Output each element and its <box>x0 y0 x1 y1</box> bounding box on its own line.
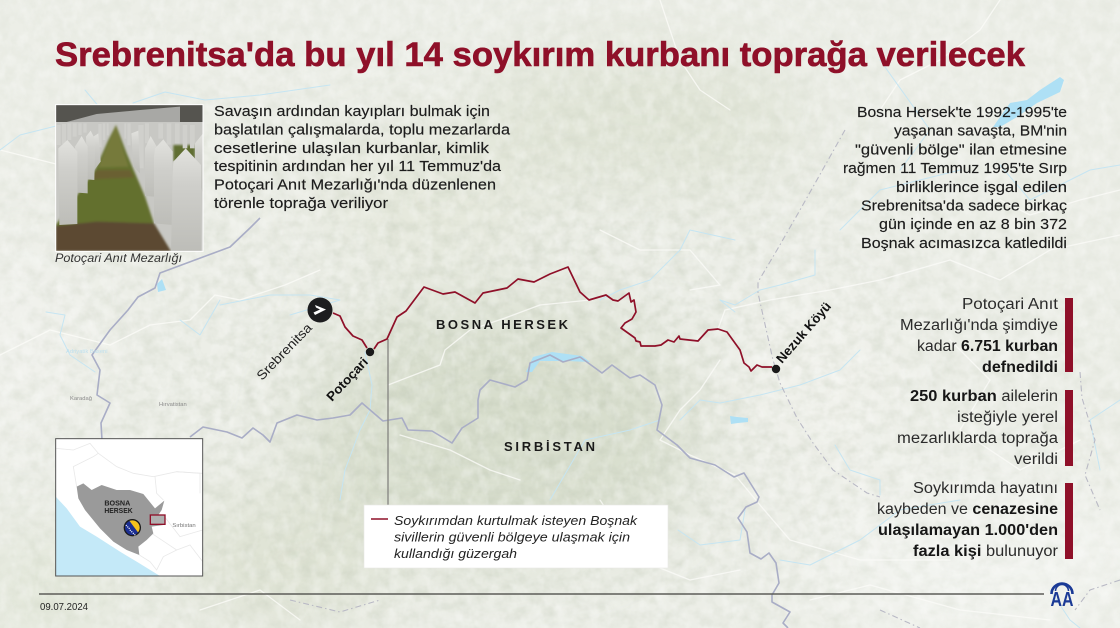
photo: Potoçari memorial <box>56 105 203 251</box>
text block: right background: Srebrenitsa'da sadece birkaç <box>861 198 1067 214</box>
small map place labels: Karadağ <box>70 396 92 402</box>
legend text <box>394 513 639 561</box>
text block: right background: gün içinde en az 8 bin 372 <box>879 217 1067 233</box>
inset label: Bosna Hersek: HERSEK <box>104 508 133 515</box>
date: 09.07.2024 <box>40 601 88 613</box>
legend text: Soykırımdan kurtulmak isteyen Boşnak <box>394 513 639 528</box>
stat: 1.000 unreached: kaybeden ve cenazesine <box>877 501 1058 518</box>
marker: Potoçari <box>366 348 374 356</box>
marker: Nezuk Köyü <box>772 365 780 373</box>
text block: right background <box>843 105 1067 252</box>
legend text: kullandığı güzergah <box>394 546 517 561</box>
text block: left intro: Savaşın ardından kayıpları bulmak için <box>214 104 490 120</box>
legend box <box>364 505 668 568</box>
text block: right background: "güvenli bölge" ilan etmesine <box>855 142 1067 158</box>
title: Srebrenitsa'da bu yıl 14 soykırım kurbanı toprağa verilecek <box>55 36 1025 74</box>
text block: left intro: başlatılan çalışmalarda, toplu mezarlarda <box>214 122 511 138</box>
international border <box>92 218 790 628</box>
stat: 6.751 buried: defnedildi <box>982 359 1058 376</box>
lakes <box>157 77 1064 424</box>
leader line to legend <box>387 339 389 505</box>
text block: left intro <box>214 104 511 212</box>
photo caption: Potoçari Anıt Mezarlığı <box>55 253 182 265</box>
label: Srebrenitsa: Srebrenitsa <box>253 320 315 383</box>
stat: 6.751 buried: Potoçari Anıt <box>962 296 1059 313</box>
text block: left intro: törenle toprağa veriliyor <box>214 196 388 212</box>
marker: Srebrenitsa <box>308 298 332 322</box>
Bosnia and Herzegovina <box>77 483 165 555</box>
stat: 6.751 buried: Mezarlığı'nda şimdiye <box>900 317 1058 334</box>
legend route swatch <box>371 518 388 520</box>
text block: right background: rağmen 11 Temmuz 1995'te Sırp <box>843 161 1067 177</box>
text block: right background: Bosna Hersek'te 1992-1995'te <box>857 105 1067 121</box>
stat: 250 local burials <box>897 388 1073 468</box>
footer rule <box>39 593 1044 595</box>
logo: Anadolu Agency <box>1050 584 1074 611</box>
stat: 1.000 unreached <box>877 480 1073 560</box>
escape route <box>333 267 772 371</box>
entity boundary dashed <box>290 130 1120 628</box>
stat: 250 local burials: isteğiyle yerel <box>957 409 1058 426</box>
study area rectangle <box>150 515 165 524</box>
legend text: sivillerin güvenli bölgeye ulaşmak için <box>394 530 630 545</box>
inset locator map <box>56 439 203 576</box>
label: Nezuk Köyü: Nezuk Köyü <box>773 299 834 366</box>
inset label: Bosna Hersek <box>104 500 133 515</box>
stat: 250 local burials: 250 kurban ailelerin <box>910 388 1058 405</box>
stat: 6.751 buried <box>900 296 1073 376</box>
small map place labels: Adriyatik Baseni <box>66 349 108 355</box>
text block: right background: Boşnak acımasızca katledildi <box>861 236 1067 252</box>
neighbouring borders <box>56 443 203 570</box>
stat: 250 local burials: mezarlıklarda toprağa <box>897 430 1058 447</box>
stat: 1.000 unreached: Soykırımda hayatını <box>913 480 1058 497</box>
text block: left intro: cesetlerine ulaşılan kurbanlar, kimlik <box>214 141 490 157</box>
label: Potoçari: Potoçari <box>323 354 371 404</box>
label: Bosna Hersek: BOSNA HERSEK <box>436 317 569 332</box>
stat: 250 local burials: verildi <box>1014 451 1058 468</box>
small map place labels: Hırvatistan <box>159 402 187 408</box>
inset label: Bosna Hersek: BOSNA <box>104 500 130 507</box>
stat: 6.751 buried: kadar 6.751 kurban <box>917 338 1058 355</box>
stat: 1.000 unreached: ulaşılamayan 1.000'den <box>878 522 1058 539</box>
text block: left intro: tespitinin ardından her yıl 11 Temmuz'da <box>214 159 502 175</box>
label: Sırbistan: SIRBİSTAN <box>504 439 595 454</box>
text block: right background: birliklerince işgal edilen <box>896 180 1067 196</box>
flag of Bosnia <box>124 519 141 536</box>
stat: 1.000 unreached: fazla kişi bulunuyor <box>913 543 1058 560</box>
small map place labels <box>66 349 187 408</box>
text block: right background: yaşanan savaşta, BM'nin <box>894 124 1067 140</box>
logo: Anadolu Agency: AA <box>1050 589 1074 611</box>
background stones <box>108 134 195 148</box>
text block: left intro: Potoçari Anıt Mezarlığı'nda düzenlenen <box>214 178 496 194</box>
inset label: Sırbistan: Sırbistan <box>172 523 196 529</box>
sea <box>56 497 160 576</box>
